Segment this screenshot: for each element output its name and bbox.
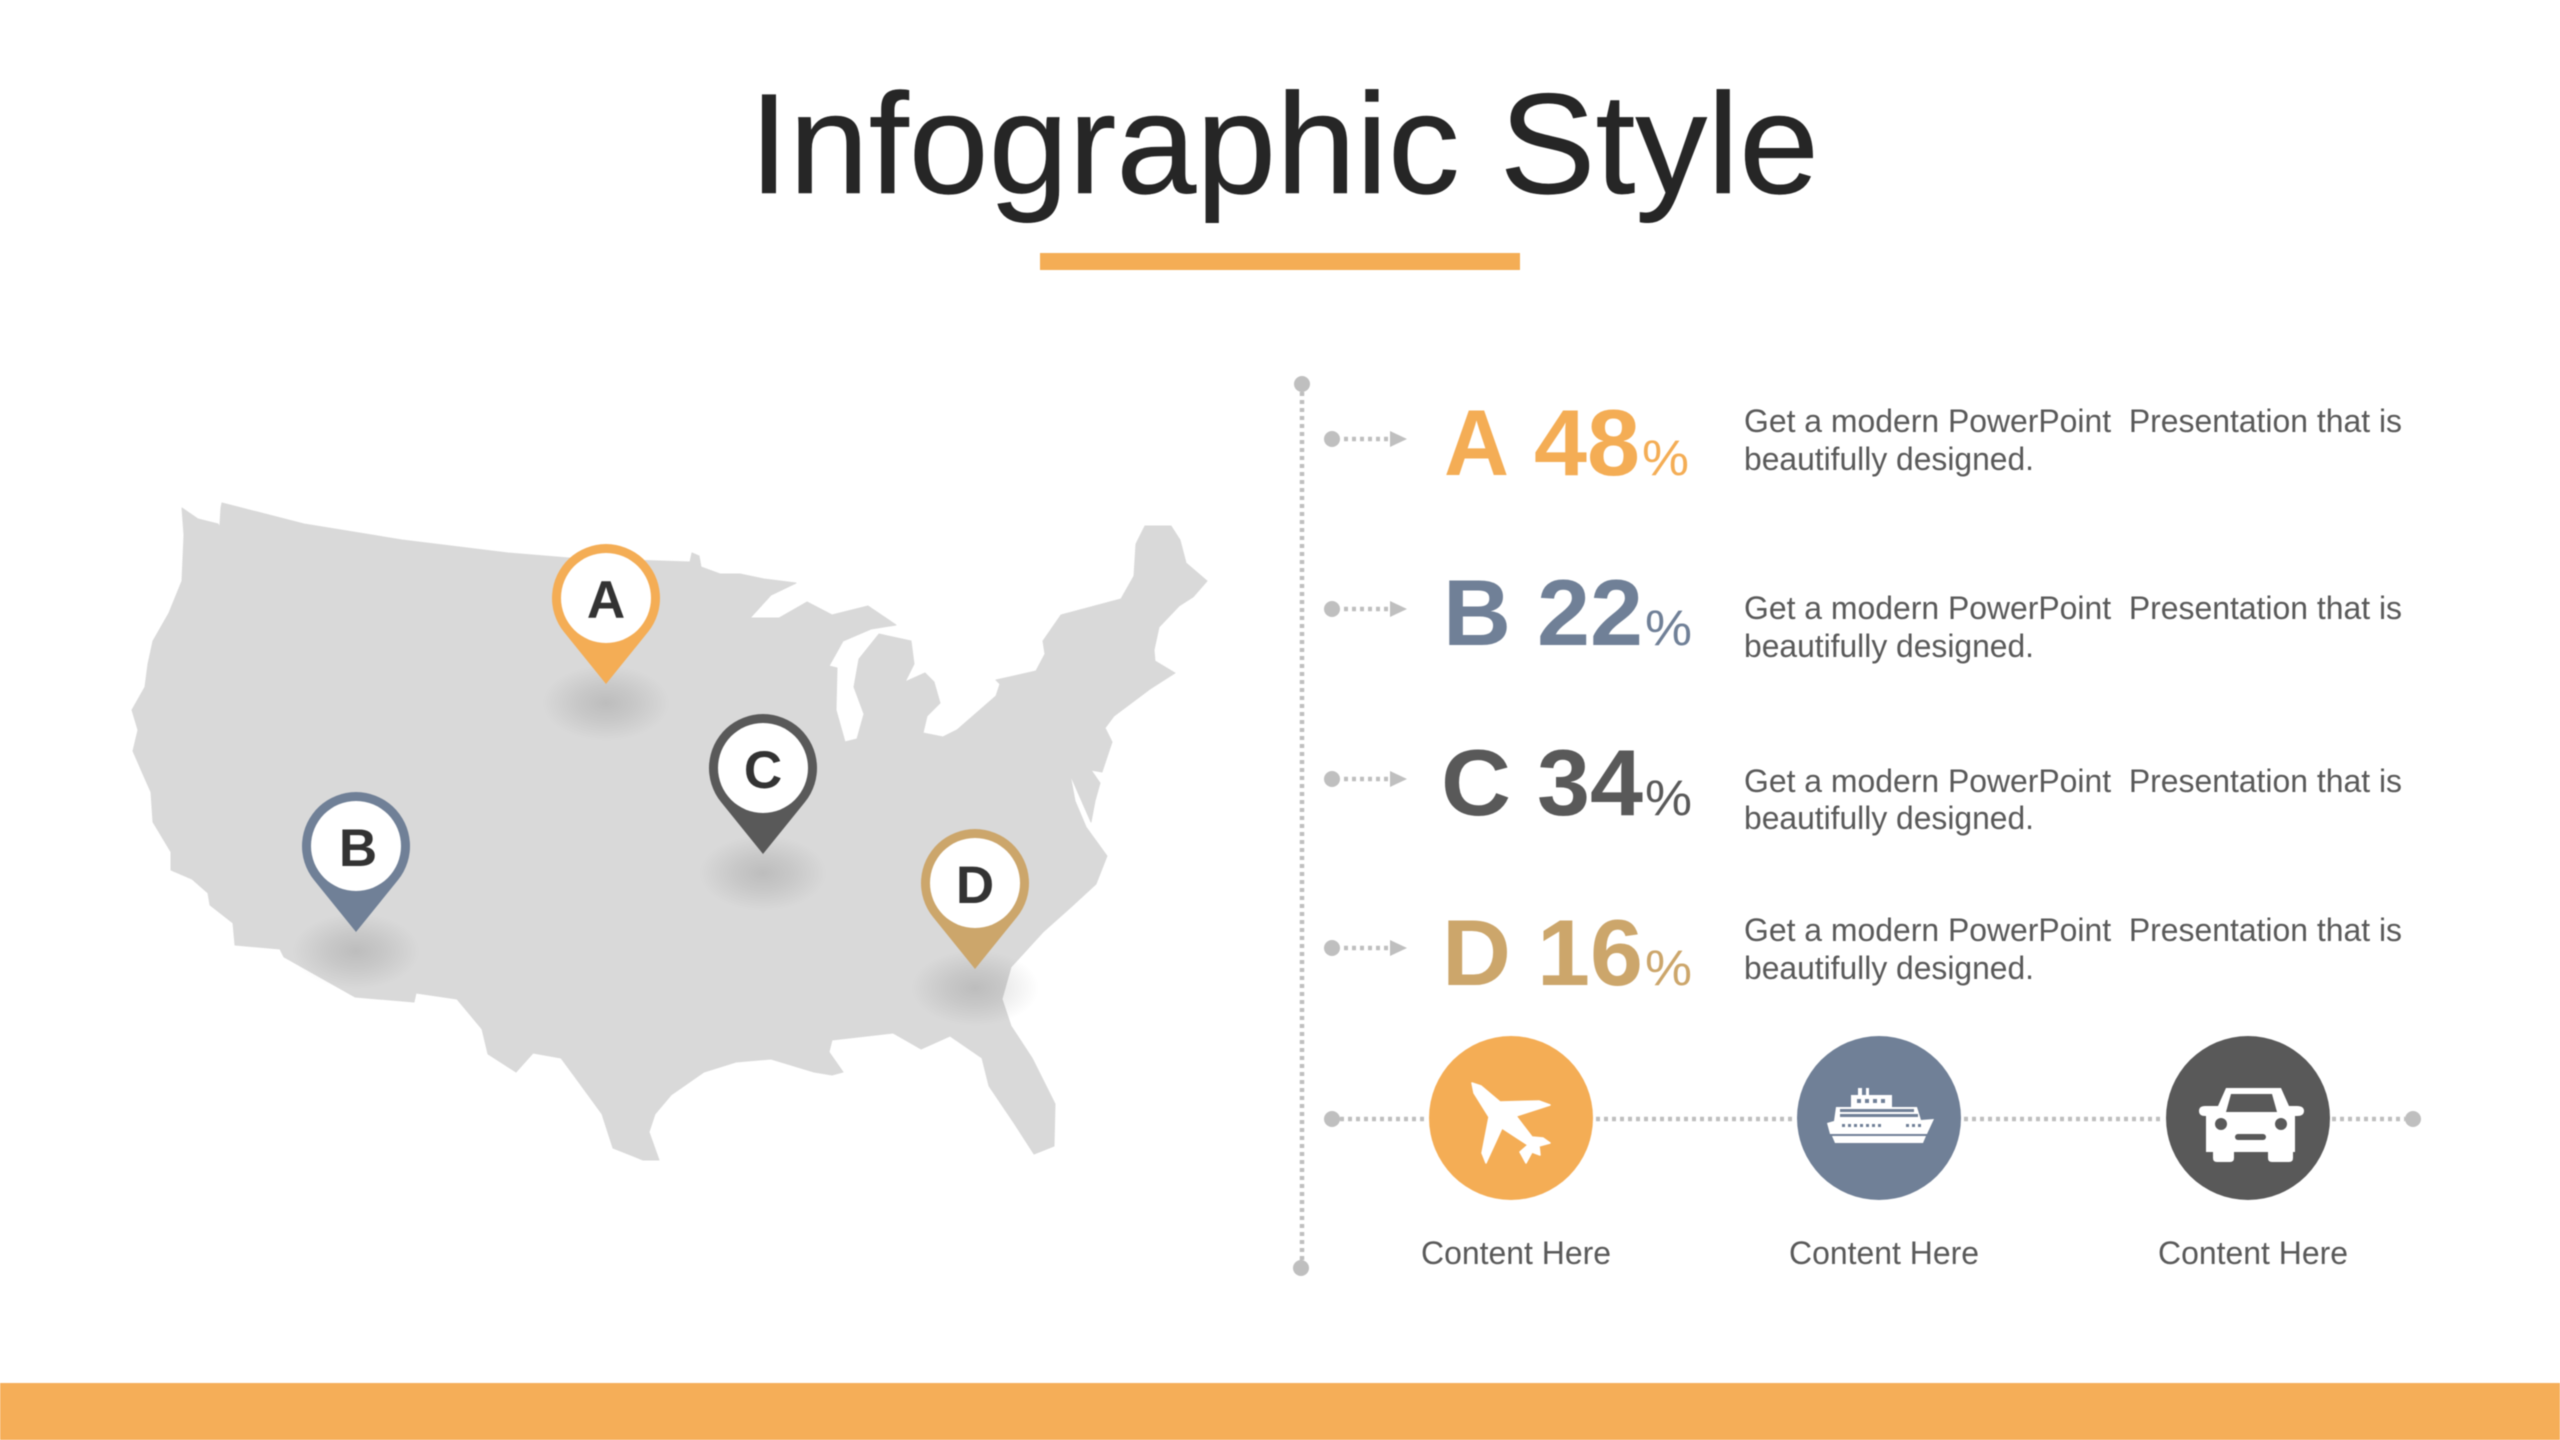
label: plane: Content Here — [1421, 1235, 1611, 1271]
map of the United States — [132, 503, 1207, 1160]
description A — [1744, 403, 2402, 477]
transport: plane — [1421, 1036, 1611, 1271]
pin A — [542, 544, 670, 741]
title underline — [1040, 253, 1520, 270]
arrow B — [1324, 601, 1407, 617]
pin D: D — [956, 856, 994, 915]
arrow D — [1324, 940, 1407, 956]
footer bar — [0, 1383, 2560, 1440]
horizontal timeline — [1324, 1111, 2421, 1127]
stat B 22% — [1443, 560, 1692, 665]
pin B: B — [339, 819, 377, 878]
title: Infographic Style — [749, 65, 1819, 224]
stat C 34% — [1441, 730, 1692, 835]
label: car: Content Here — [2158, 1235, 2348, 1271]
transport: ship — [1789, 1036, 1979, 1271]
pin C: C — [744, 741, 782, 800]
stat A 48%: 48 — [1534, 390, 1640, 495]
description B: beautifully designed. — [1744, 628, 2034, 664]
vertical timeline — [1293, 376, 1310, 1276]
stat A 48% — [1444, 390, 1689, 495]
row C — [1324, 730, 2402, 836]
stat D 16%: 16 — [1537, 900, 1643, 1005]
description D: beautifully designed. — [1744, 950, 2034, 986]
description B: Get a modern PowerPoint Presentation that is — [1744, 590, 2402, 626]
description A: beautifully designed. — [1744, 441, 2034, 477]
stat C 34%: % — [1645, 770, 1692, 826]
stat D 16%: D — [1442, 900, 1511, 1005]
stat A 48%: % — [1642, 430, 1689, 486]
icon: plane — [1429, 1036, 1593, 1200]
arrow C — [1324, 771, 1407, 787]
icon: car — [2166, 1036, 2330, 1200]
description D — [1744, 912, 2402, 986]
description C: Get a modern PowerPoint Presentation that is — [1744, 763, 2402, 799]
pin C — [699, 714, 827, 911]
description D: Get a modern PowerPoint Presentation that is — [1744, 912, 2402, 948]
stat B 22%: % — [1645, 600, 1692, 656]
stat D 16%: % — [1645, 940, 1692, 996]
row B — [1324, 560, 2402, 665]
description B — [1744, 590, 2402, 664]
icon: ship — [1797, 1036, 1961, 1200]
pin A: A — [587, 571, 625, 630]
pin D — [911, 829, 1039, 1026]
label: ship: Content Here — [1789, 1235, 1979, 1271]
stat C 34%: C — [1441, 730, 1511, 835]
description A: Get a modern PowerPoint Presentation that is — [1744, 403, 2402, 439]
stat A 48%: A — [1444, 390, 1509, 495]
stat B 22%: B — [1443, 560, 1511, 665]
arrow A — [1324, 431, 1407, 447]
row A — [1324, 390, 2402, 495]
description C — [1744, 763, 2402, 836]
pin B — [292, 792, 420, 989]
stat C 34%: 34 — [1537, 730, 1643, 835]
row D — [1324, 900, 2402, 1005]
transport: car — [2158, 1036, 2348, 1271]
description C: beautifully designed. — [1744, 800, 2034, 836]
panel: US map with pins — [132, 503, 1207, 1160]
stat D 16% — [1442, 900, 1692, 1005]
stat B 22%: 22 — [1537, 560, 1643, 665]
